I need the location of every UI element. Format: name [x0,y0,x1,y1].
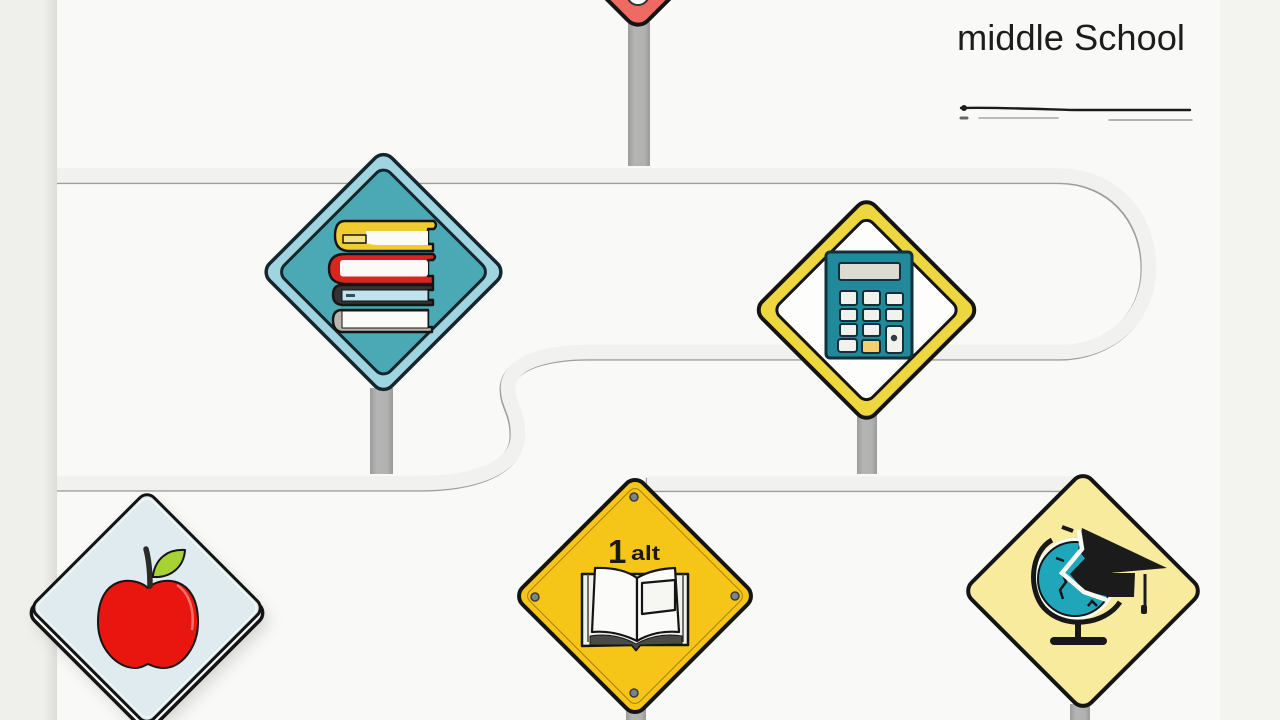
sign post: calculator [857,415,877,474]
sign: open book [514,475,756,717]
sign: red, cropped at top [521,0,755,30]
sign face: yellow diamond [754,197,979,423]
icon: calculator [826,252,912,358]
panel edge shadow [44,0,57,720]
sign post: books [370,388,393,474]
title: middle School [957,17,1185,58]
winding road [29,176,1149,485]
background: right margin [1220,0,1280,720]
sign shadow [30,498,274,720]
screws [531,493,739,697]
sign: calculator [754,197,979,423]
sign face: cream diamond [963,471,1203,711]
sign face: pale blue diamond [27,491,267,720]
icon: graduation cap [1062,527,1167,614]
icon: apple [98,549,198,668]
background: left margin [0,0,44,720]
icon: globe [1034,538,1120,641]
sign post: open book [626,708,646,720]
sign: stacked books [261,150,506,394]
sign post: globe [1070,704,1090,720]
sign number: 1 [608,533,626,570]
sign post: top [628,22,650,166]
sign: apple [27,491,274,720]
title underline [961,105,1192,120]
sign face: yellow diamond [514,475,756,717]
sign: globe and graduation cap [963,471,1203,711]
icon: open book [582,568,688,650]
icon: stack of books [329,221,436,332]
sign face: teal diamond [261,150,506,394]
sign label: alt [631,543,660,565]
